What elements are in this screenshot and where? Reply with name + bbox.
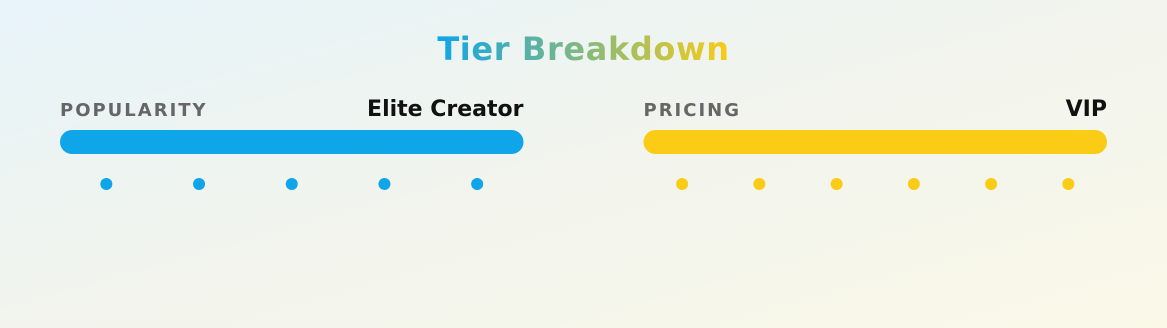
panel: popularity	[60, 97, 524, 190]
popularity bar	[60, 130, 524, 154]
title: Tier Breakdown	[437, 30, 730, 68]
pricing dots	[676, 178, 1074, 190]
popularity value: Elite Creator	[367, 97, 524, 122]
panel: pricing	[644, 97, 1107, 190]
pricing value: VIP	[1066, 97, 1107, 122]
popularity dots	[100, 178, 484, 190]
pricing label: PRICING	[644, 100, 741, 121]
popularity label: POPULARITY	[60, 100, 208, 121]
pricing bar	[644, 130, 1107, 154]
